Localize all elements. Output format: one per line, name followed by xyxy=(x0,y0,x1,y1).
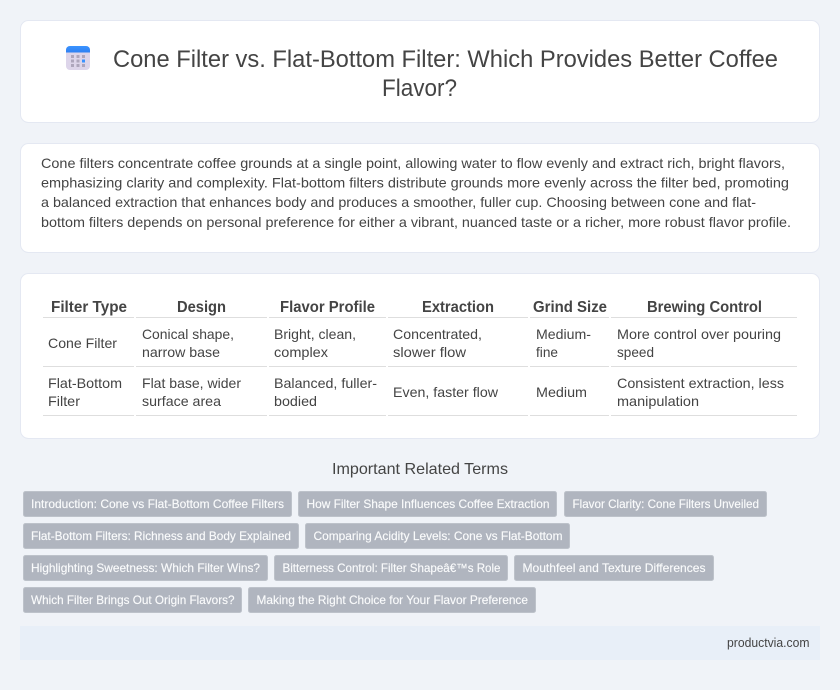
table row: cone filter: More control over pouring xyxy=(617,326,781,342)
tag: filter shape: How Filter Shape Influences Coffee Extraction xyxy=(306,497,550,511)
table row: cone filter: narrow base xyxy=(142,344,220,360)
table header row: Filter Type xyxy=(51,299,127,316)
table row: flat-bottom filter: Consistent extraction, less xyxy=(617,375,784,391)
tag: sweetness xyxy=(24,556,268,580)
title: Cone Filter vs. Flat-Bottom Filter: Which Provides Better Coffee xyxy=(113,46,778,73)
table header row: Brewing Control xyxy=(647,299,762,316)
table row: cone filter: speed xyxy=(617,344,654,360)
table row: flat-bottom filter: Balanced, fuller- xyxy=(274,375,377,391)
table row: flat-bottom filter: surface area xyxy=(142,393,221,409)
table row: flat-bottom filter: Filter xyxy=(48,393,80,409)
table row: flat-bottom filter: Flat base, wider xyxy=(142,375,241,391)
table header row xyxy=(43,299,797,318)
tag: bitterness: Bitterness Control: Filter Shapeâ€™s Role xyxy=(282,561,501,575)
tag: origin flavors xyxy=(24,588,242,612)
text block: summary: bottom filters depends on personal preference for either a vibrant, nuanced taste or a richer, more robust flavor profile. xyxy=(41,214,791,230)
tag: bitterness xyxy=(274,556,508,580)
tag: mouthfeel: Mouthfeel and Texture Differences xyxy=(522,561,706,575)
panel: comparison table xyxy=(20,274,820,438)
table header row: Extraction xyxy=(422,299,494,316)
tag list xyxy=(24,492,766,612)
panel: intro paragraph xyxy=(20,144,820,252)
table row: flat-bottom filter: bodied xyxy=(274,393,317,409)
table row: cone filter: slower flow xyxy=(393,344,467,360)
tag: origin flavors: Which Filter Brings Out Origin Flavors? xyxy=(31,593,235,607)
table header row: Flavor Profile xyxy=(280,299,375,316)
title: Flavor? xyxy=(382,75,457,102)
tag: filter shape xyxy=(298,492,556,516)
tag: acidity: Comparing Acidity Levels: Cone vs Flat-Bottom xyxy=(314,529,562,543)
table row: flat-bottom filter xyxy=(43,375,797,416)
table row: cone filter: complex xyxy=(274,344,328,360)
panel: title header xyxy=(20,20,820,122)
tag: introduction: Introduction: Cone vs Flat-Bottom Coffee Filters xyxy=(31,497,284,511)
table row: flat-bottom filter: Even, faster flow xyxy=(393,384,499,400)
tag: introduction xyxy=(24,492,292,516)
table header row: Grind Size xyxy=(533,299,607,316)
tag: richness and body xyxy=(24,524,298,548)
table row: cone filter: Conical shape, xyxy=(142,326,234,342)
tag: flavor clarity xyxy=(564,492,766,516)
tag: flavor clarity: Flavor Clarity: Cone Filters Unveiled xyxy=(572,497,759,511)
tag: mouthfeel xyxy=(514,556,714,580)
tag: sweetness: Highlighting Sweetness: Which Filter Wins? xyxy=(31,561,260,575)
footer bar: productvia.com xyxy=(727,635,810,650)
tag: right choice xyxy=(248,588,536,612)
table row: cone filter: Cone Filter xyxy=(48,335,117,351)
table row: flat-bottom filter: Medium xyxy=(536,384,587,400)
icon: calendar xyxy=(66,46,90,70)
table row: cone filter: Concentrated, xyxy=(393,326,482,342)
tag: richness and body: Flat-Bottom Filters: Richness and Body Explained xyxy=(31,529,291,543)
heading: important related terms: Important Related Terms xyxy=(332,461,508,478)
text block: summary: Cone filters concentrate coffee grounds at a single point, allowing water to flow evenly and extract rich, bright flavors, xyxy=(41,155,785,171)
text block: summary: emphasizing clarity and complexity. Flat-bottom filters distribute grounds more evenly across the filter bed, promoting xyxy=(41,175,789,191)
table row: cone filter xyxy=(43,326,797,367)
tag: acidity xyxy=(306,524,570,548)
table row: flat-bottom filter: manipulation xyxy=(617,393,699,409)
table row: flat-bottom filter: Flat-Bottom xyxy=(48,375,122,391)
text block: summary xyxy=(41,155,791,230)
table header row: Design xyxy=(177,299,226,316)
table row: cone filter: fine xyxy=(536,344,558,360)
title xyxy=(113,46,778,102)
table row: cone filter: Medium- xyxy=(536,326,591,342)
table row: cone filter: Bright, clean, xyxy=(274,326,356,342)
text block: summary: a balanced extraction that enhances body and produces a smoother, fuller cup. Choosing between cone and flat- xyxy=(41,194,756,210)
footer bar xyxy=(20,626,820,660)
tag: right choice: Making the Right Choice for Your Flavor Preference xyxy=(256,593,528,607)
